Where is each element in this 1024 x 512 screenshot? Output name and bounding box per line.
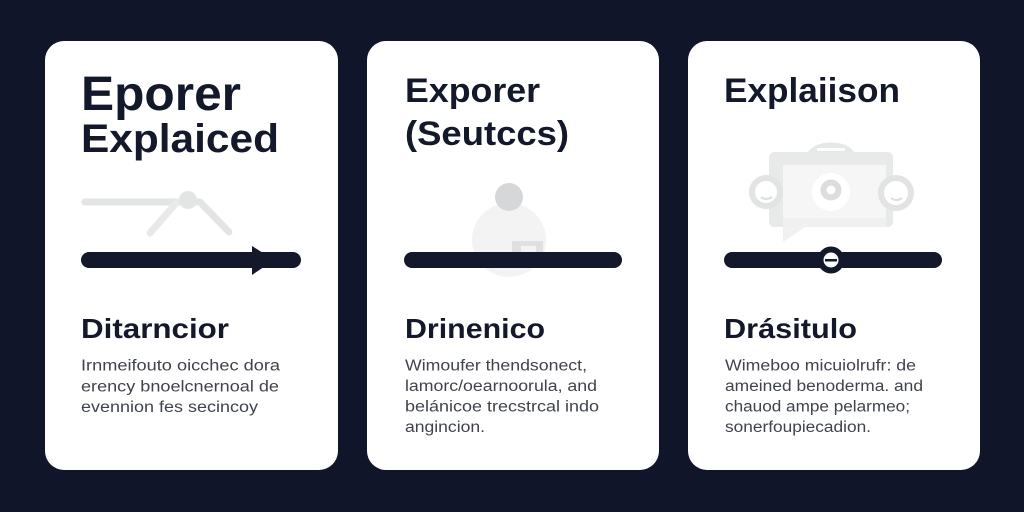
text block: card 1 body: erency bnoelcnernoal de [81, 378, 279, 396]
icon: faint bent line [85, 191, 229, 233]
text block: card 3 body: Wimeboo micuiolrufr: de [725, 358, 916, 374]
subheading: card 2: Drinenico [405, 313, 545, 344]
text block: card 1 body [81, 358, 280, 416]
panel: card 3 [688, 41, 980, 470]
text block: card 2 body: angincion. [405, 419, 485, 436]
text block: card 2 body [405, 358, 599, 436]
slider with centre knob [724, 246, 942, 274]
subheading: card 1: Ditarncior [81, 313, 229, 344]
text block: card 2 body: Wimoufer thendsonect, [405, 358, 587, 374]
slider bar [404, 252, 622, 268]
icon: faint device with speech tail and circles [752, 142, 911, 242]
panel: card 2 [367, 41, 659, 470]
heading: card 1 title: Eporer [81, 68, 241, 121]
text block: card 2 body: belánicoe trecstrcal indo [405, 398, 599, 416]
heading: card 2 title [405, 72, 569, 153]
text block: card 3 body: sonerfoupiecadion. [725, 419, 871, 436]
heading: card 1 title: Explaiced [81, 117, 279, 161]
arrow: progress bar with arrowhead [81, 246, 301, 275]
text block: card 3 body: chauod ampe pelarmeo; [725, 398, 910, 416]
heading: card 1 title [81, 68, 279, 161]
heading: card 2 title: Exporer [405, 72, 540, 110]
heading: card 3 title: Explaiison [724, 72, 900, 110]
icon: faint person figure [472, 183, 546, 277]
text block: card 1 body: evennion fes secincoy [81, 399, 258, 416]
text block: card 3 body [725, 358, 923, 436]
text block: card 2 body: lamorc/oearnoorula, and [405, 378, 597, 395]
panel: card 1 [45, 41, 338, 470]
subheading: card 3: Drásitulo [724, 313, 857, 344]
text block: card 1 body: Irnmeifouto oicchec dora [81, 358, 280, 374]
text block: card 3 body: ameined benoderma. and [725, 378, 923, 395]
heading: card 2 title: (Seutccs) [405, 115, 569, 153]
